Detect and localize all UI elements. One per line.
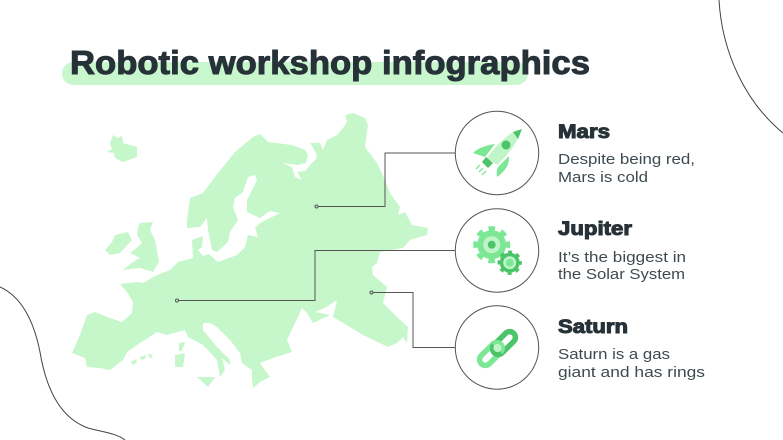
text block: Saturn: giant and has rings [558,364,705,381]
text block: Mars: Despite being red, [558,151,695,168]
Ireland [105,232,132,255]
icon: rocket [455,111,539,195]
text block: Mars [558,122,695,186]
connector: Jupiter [176,250,456,302]
text block: Saturn: Saturn [558,317,628,338]
connector: Saturn [370,291,456,348]
text block: Mars: Mars [558,122,610,143]
icon: chain link [455,306,539,389]
connector: Mars [315,153,456,208]
Mediterranean islands [131,342,215,387]
text block: Saturn [558,317,705,381]
text block: Jupiter: Jupiter [558,219,633,240]
map of Europe [72,113,428,388]
mainland [72,113,428,388]
text block: Jupiter: It’s the biggest in [558,249,686,266]
Great Britain [123,222,159,272]
title: Robotic workshop infographics [70,44,590,81]
icon: gears [455,209,539,292]
Iceland [107,135,137,162]
text block: Jupiter [558,219,686,283]
text block: Saturn: Saturn is a gas [558,346,670,363]
text block: Jupiter: the Solar System [558,266,685,283]
text block: Mars: Mars is cold [558,169,648,186]
